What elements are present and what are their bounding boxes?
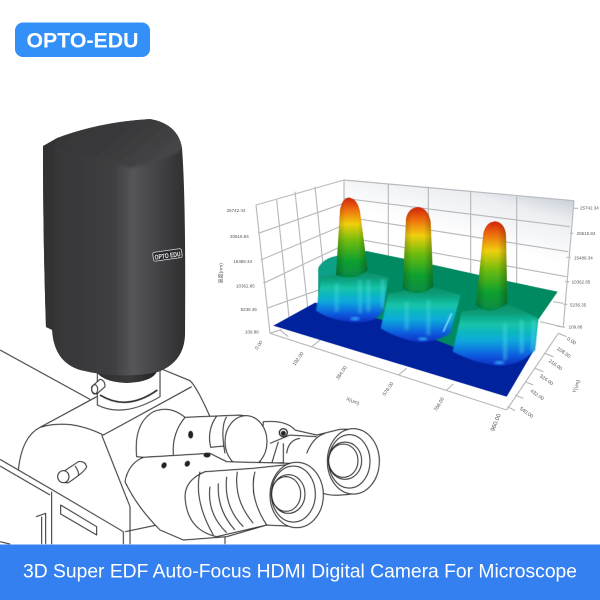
axis tick labels: 576.00 xyxy=(382,381,396,397)
axis tick labels: 5236.35 xyxy=(570,302,587,307)
peak 3 xyxy=(476,221,507,311)
left eyepiece xyxy=(185,463,323,537)
3D surface chart xyxy=(218,180,599,432)
green plateau xyxy=(318,251,558,347)
footer banner xyxy=(0,544,600,600)
axis tick labels: 20615.84 xyxy=(577,231,596,236)
peak 2 xyxy=(403,207,433,293)
axis tick labels: Y(um) xyxy=(572,379,582,394)
axis tick labels: 高度(nm) xyxy=(218,263,225,283)
blue floor xyxy=(273,303,535,397)
block 3 xyxy=(453,305,538,366)
left eyepiece tube xyxy=(136,409,267,472)
axis tick labels: 216.00 xyxy=(547,358,563,372)
peak 1 xyxy=(336,198,368,277)
axis tick labels: 20615.84 xyxy=(230,234,249,239)
camera mount xyxy=(97,370,160,410)
block 2 xyxy=(381,287,461,343)
focus knob xyxy=(58,462,87,483)
camera side rail xyxy=(43,141,55,330)
axis tick labels: 15489.34 xyxy=(574,255,593,260)
axis tick labels: 960.00 xyxy=(490,413,503,432)
axis tick labels xyxy=(218,206,599,432)
chart back wall xyxy=(344,180,574,290)
camera collar xyxy=(94,340,158,383)
axis tick labels: 768.00 xyxy=(433,396,446,413)
axis tick labels: 324.00 xyxy=(538,373,554,387)
axis tick labels: 109.86 xyxy=(569,325,583,330)
camera xyxy=(43,117,186,383)
teal plateau rim xyxy=(319,256,337,305)
axis tick labels: 0.00 xyxy=(254,340,265,351)
axis tick labels: X(um) xyxy=(345,396,360,407)
axis tick labels: 0.00 xyxy=(566,336,577,347)
axis tick labels: 109.86 xyxy=(245,329,259,334)
camera logo xyxy=(153,248,183,262)
axis tick labels: 10362.85 xyxy=(572,279,591,284)
axis tick labels: 15489.34 xyxy=(233,259,253,264)
footer banner: 3D Super EDF Auto-Focus HDMI Digital Camera For Microscope xyxy=(23,560,577,582)
axis tick labels: 384.00 xyxy=(335,365,349,381)
axis tick labels: 25742.34 xyxy=(580,206,599,211)
brand badge: OPTO-EDU xyxy=(26,30,138,52)
camera body xyxy=(43,119,185,376)
axis tick labels: 540.00 xyxy=(518,406,534,420)
camera top face xyxy=(55,117,186,168)
axis tick labels: 5236.35 xyxy=(241,307,257,312)
axis tick labels: 192.00 xyxy=(292,351,306,367)
camera logo: OPTO EDU xyxy=(154,251,181,262)
axis tick labels: 10362.85 xyxy=(236,283,255,288)
microscope head xyxy=(18,368,210,470)
microscope line drawing xyxy=(0,350,379,544)
axis tick labels: 108.00 xyxy=(556,346,572,360)
brand badge xyxy=(15,22,150,57)
block 1 xyxy=(316,272,388,323)
axis tick labels: 25742.34 xyxy=(227,208,246,213)
right eyepiece tube xyxy=(260,421,379,495)
axis tick labels: 432.00 xyxy=(529,388,545,402)
